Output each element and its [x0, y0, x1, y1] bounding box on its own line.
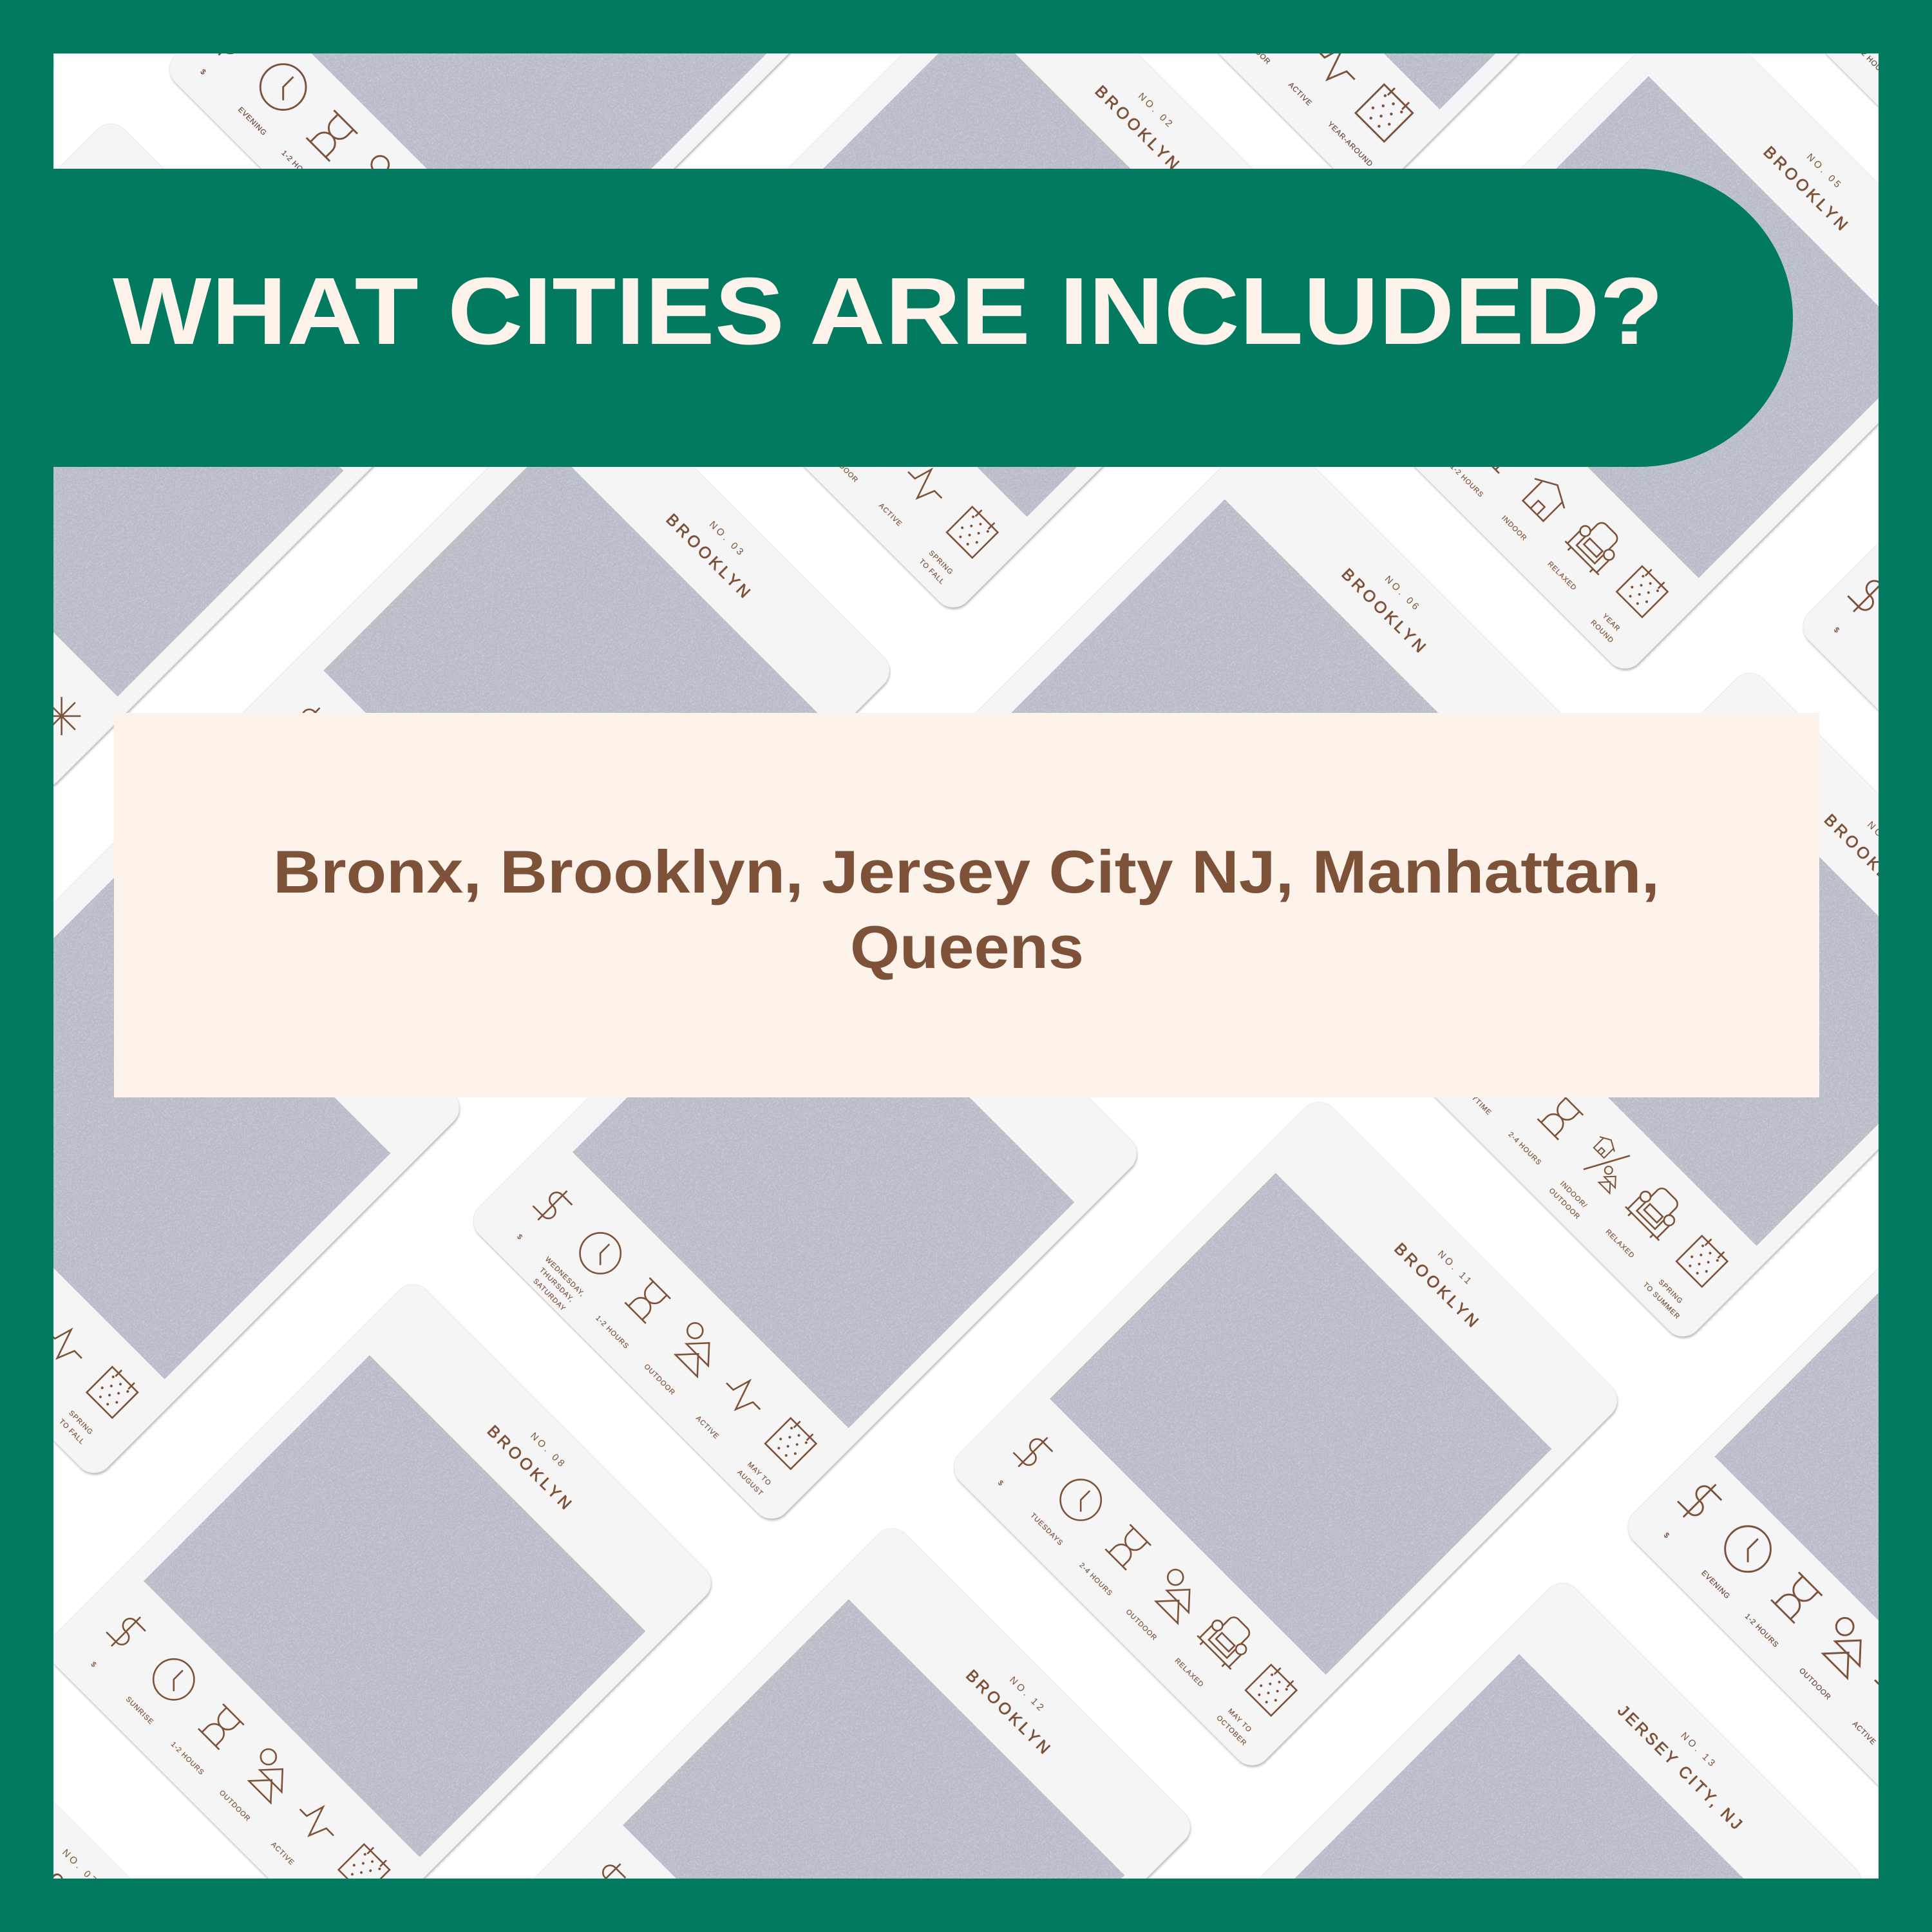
- icons and labels: [208, 10, 509, 312]
- card heading: NO. 03: [707, 519, 747, 559]
- icons: [1474, 424, 1671, 621]
- card heading: NO. 08: [528, 1430, 569, 1471]
- labels: ACTIVE: [1851, 1720, 1877, 1747]
- labels: [1454, 1084, 1690, 1321]
- icons: [1672, 1473, 1927, 1728]
- labels: 1-2 HOURS: [594, 1314, 630, 1350]
- labels: OUTDOOR: [1237, 32, 1272, 66]
- icon: dollar: [1842, 569, 1897, 623]
- card: No. 11: [945, 1094, 1626, 1775]
- labels: ACTIVE: [877, 502, 904, 528]
- labels: TO FALL: [57, 1417, 86, 1446]
- labels: $: [515, 1233, 524, 1242]
- labels: ACTIVE: [269, 1841, 296, 1867]
- card: Wednesday Thursday Saturday: [465, 848, 1146, 1528]
- title banner: [0, 169, 1793, 467]
- card heading: BROOKLYN: [1821, 811, 1914, 904]
- labels: INDOOR/: [1558, 1180, 1589, 1210]
- labels: $: [90, 1660, 98, 1669]
- icon: dollar: [281, 698, 329, 746]
- labels: OUTDOOR: [218, 1789, 252, 1823]
- labels: 1-2 HOURS: [1449, 463, 1485, 499]
- icons: [1009, 1423, 1303, 1718]
- labels: 1-2 HOURS: [280, 149, 316, 186]
- labels: 1-2 HOURS: [169, 1741, 205, 1777]
- labels: [988, 1478, 1257, 1747]
- labels: EVENING: [1700, 1569, 1731, 1601]
- labels: SATURDAY: [531, 1277, 567, 1313]
- labels: OUTDOOR: [826, 450, 860, 484]
- card heading: NO. 06: [1383, 574, 1423, 614]
- card: No. 12: [528, 1520, 1199, 1932]
- icons: [1256, 0, 1416, 142]
- labels: WEDNESDAY,: [544, 1256, 586, 1298]
- icons: [849, 406, 1001, 558]
- card heading: BROOKLYN: [962, 1667, 1056, 1760]
- title: WHAT CITIES ARE INCLUDED?: [113, 258, 1663, 365]
- card: evening card right: [1619, 1154, 1932, 1835]
- card: spring to fall left: [0, 799, 468, 1482]
- card heading: BROOKLYN: [663, 511, 756, 604]
- card: No. 10 indoor and outdoor: [1376, 665, 1932, 1346]
- answer text: [273, 838, 1660, 981]
- labels: YEAR-AROUND: [1326, 120, 1374, 169]
- answer panel: [114, 713, 1819, 1097]
- labels: ACTIVE: [694, 1414, 721, 1441]
- labels: OUTDOOR: [334, 204, 369, 238]
- labels: 2-4 HOURS: [1077, 1562, 1114, 1598]
- card: evening card top left: [161, 0, 842, 376]
- card heading: NO. 11: [1435, 1249, 1475, 1288]
- card heading: BROOKLYN: [1760, 143, 1853, 236]
- card heading: BROOKLYN: [1338, 565, 1432, 658]
- answer text: Queens: [850, 913, 1084, 981]
- labels: [818, 449, 955, 586]
- labels: ACTIVE: [1287, 81, 1313, 108]
- card: year-around: [1061, 0, 1743, 205]
- labels: $: [1662, 1531, 1671, 1540]
- labels: TO SUMMER: [1642, 1281, 1681, 1321]
- card heading: [14, 1822, 100, 1908]
- labels: $: [996, 1479, 1005, 1488]
- card: No. 13 Jersey City: [1231, 1575, 1870, 1932]
- card heading: BROOK: [14, 1837, 80, 1902]
- card: bottom left corner: [0, 1693, 159, 1932]
- labels: RELAXED: [1604, 1228, 1636, 1260]
- labels: OUTDOOR: [1797, 1667, 1832, 1701]
- labels: ROUND: [1589, 619, 1615, 645]
- labels: MAY TO: [746, 1461, 773, 1488]
- labels: 1-2 HOURS: [1743, 1613, 1780, 1649]
- card: No. 02: [647, 0, 1327, 617]
- labels: [1237, 32, 1374, 169]
- labels: OUTDOOR: [1548, 1187, 1582, 1221]
- card heading: BROOKLYN: [1390, 1240, 1484, 1333]
- label: $: [1832, 626, 1841, 635]
- labels: SPRING: [1657, 1278, 1684, 1305]
- card heading: NO. 05: [1804, 151, 1844, 192]
- labels: $: [198, 68, 207, 77]
- icons: [528, 1180, 819, 1471]
- card heading: NO. 10: [1865, 819, 1906, 860]
- labels: SPRING: [927, 549, 954, 576]
- labels: ACTIVE: [387, 257, 414, 283]
- card: No. 05: [1318, 0, 1932, 678]
- labels: SPRING: [67, 1409, 95, 1437]
- card heading: NO. 12: [1007, 1674, 1048, 1715]
- card: corner sliver top left: [0, 0, 62, 436]
- labels: 2-4 HOURS: [1507, 1131, 1543, 1167]
- card: No. 03: [218, 365, 898, 1045]
- labels: [90, 1660, 296, 1867]
- labels: INDOOR: [1500, 515, 1528, 542]
- card heading: JERSEY CITY, NJ: [1614, 1701, 1747, 1835]
- card: right edge dollar card: [1794, 254, 1932, 934]
- labels: MAY TO: [1226, 1707, 1253, 1734]
- answer text: Bronx, Brooklyn, Jersey City NJ, Manhattan,: [273, 838, 1660, 905]
- card: No. 06: [895, 421, 1575, 1101]
- card heading: NO. 13: [1678, 1730, 1719, 1770]
- labels: AUGUST: [735, 1469, 764, 1498]
- labels: SUNRISE: [124, 1696, 155, 1727]
- icons: [1482, 1039, 1732, 1289]
- labels: [198, 68, 414, 283]
- label: 1-2 HOURS: [1854, 44, 1891, 81]
- labels: [57, 1408, 95, 1446]
- icon: snowflake: [34, 689, 89, 743]
- labels: EVENING: [236, 106, 268, 137]
- labels: ANYTIME: [1462, 1086, 1493, 1117]
- card heading: NO. 07: [60, 1847, 100, 1888]
- labels: RELAXED: [1173, 1657, 1205, 1689]
- card heading: BROOKLYN: [484, 1422, 577, 1515]
- icon: dollar: [582, 1854, 630, 1902]
- card: snowflake card left: [0, 116, 418, 797]
- labels: YEAR: [1601, 612, 1622, 633]
- card: No. 08: [39, 1276, 720, 1932]
- labels: OCTOBER: [1215, 1714, 1248, 1747]
- icons: [37, 1314, 141, 1418]
- labels: [1662, 1531, 1877, 1747]
- card heading: BROOKLYN: [1092, 82, 1185, 176]
- labels: TO FALL: [918, 558, 946, 586]
- labels: RELAXED: [1546, 560, 1578, 592]
- labels: [1441, 462, 1624, 645]
- card: top right corner: [1730, 0, 1932, 266]
- icons: [102, 1606, 393, 1897]
- labels: THURSDAY,: [538, 1266, 575, 1304]
- labels: OUTDOOR: [643, 1363, 677, 1397]
- labels: OUTDOOR: [1124, 1608, 1159, 1642]
- card heading: NO. 02: [1136, 91, 1176, 131]
- labels: [501, 1230, 775, 1504]
- labels: TUESDAYS: [1028, 1511, 1065, 1548]
